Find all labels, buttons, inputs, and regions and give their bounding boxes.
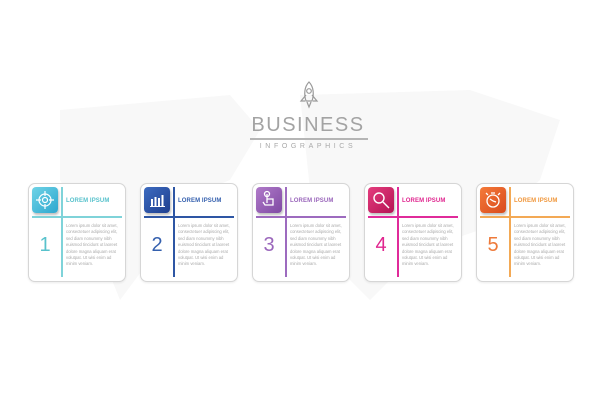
- text block: Lorem ipsum dolor sit amet, consectetuer adipiscing elit, sed diam nonummy nibh euismod tincidunt ut laoreet dolore magna aliquam erat volutpat. Ut wisi enim ad minim veniam.: [402, 223, 454, 266]
- icon: rocket: [300, 81, 318, 108]
- number: 2: [151, 234, 163, 256]
- panel: step 2: [140, 183, 238, 282]
- heading: LOREM IPSUM: [178, 198, 221, 204]
- panel: step 5: [476, 183, 574, 282]
- subtitle: INFOGRAPHICS: [260, 143, 356, 150]
- icon: bar chart: [144, 187, 170, 213]
- icon: magnifier: [368, 187, 394, 213]
- number: 1: [39, 234, 51, 256]
- heading: LOREM IPSUM: [514, 198, 557, 204]
- number: 5: [487, 234, 499, 256]
- icon: target: [32, 187, 58, 213]
- text block: Lorem ipsum dolor sit amet, consectetuer adipiscing elit, sed diam nonummy nibh euismod tincidunt ut laoreet dolore magna aliquam erat volutpat. Ut wisi enim ad minim veniam.: [514, 223, 566, 266]
- heading: LOREM IPSUM: [402, 198, 445, 204]
- text block: Lorem ipsum dolor sit amet, consectetuer adipiscing elit, sed diam nonummy nibh euismod tincidunt ut laoreet dolore magna aliquam erat volutpat. Ut wisi enim ad minim veniam.: [66, 223, 118, 266]
- number: 4: [375, 234, 387, 256]
- icon: hand pointer: [256, 187, 282, 213]
- heading: LOREM IPSUM: [66, 198, 109, 204]
- title: BUSINESS: [251, 114, 365, 136]
- text block: Lorem ipsum dolor sit amet, consectetuer adipiscing elit, sed diam nonummy nibh euismod tincidunt ut laoreet dolore magna aliquam erat volutpat. Ut wisi enim ad minim veniam.: [178, 223, 230, 266]
- heading: LOREM IPSUM: [290, 198, 333, 204]
- number: 3: [263, 234, 275, 256]
- panel: step 3: [252, 183, 350, 282]
- panel: step 4: [364, 183, 462, 282]
- panel: step 1: [28, 183, 126, 282]
- icon: stopwatch: [480, 187, 506, 213]
- text block: Lorem ipsum dolor sit amet, consectetuer adipiscing elit, sed diam nonummy nibh euismod tincidunt ut laoreet dolore magna aliquam erat volutpat. Ut wisi enim ad minim veniam.: [290, 223, 342, 266]
